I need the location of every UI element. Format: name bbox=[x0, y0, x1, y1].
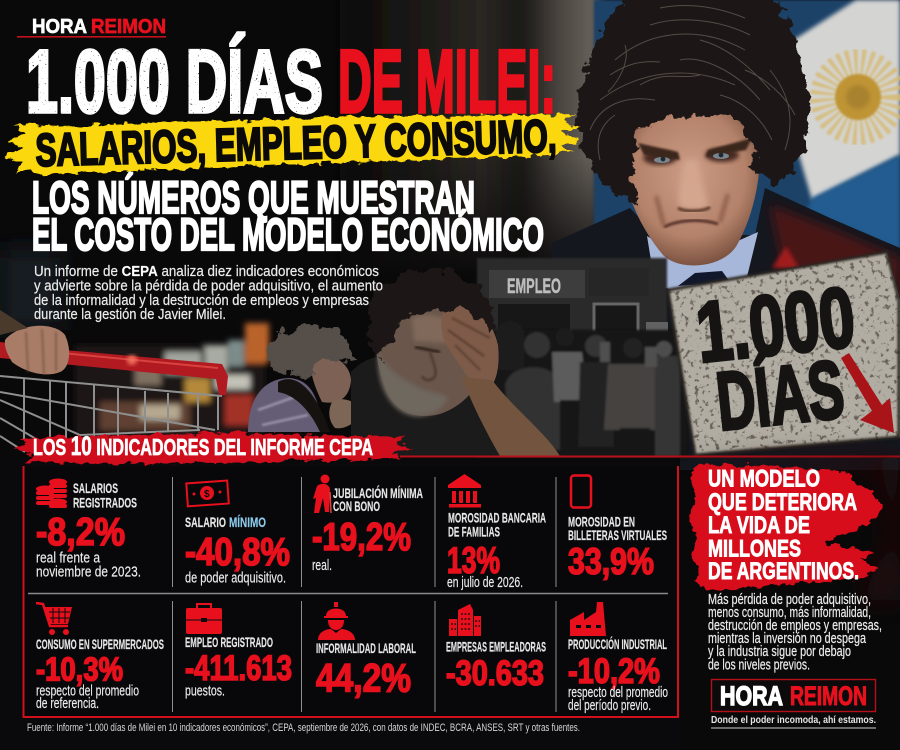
small brand: HORA bbox=[32, 16, 87, 38]
intro paragraph bbox=[34, 264, 383, 323]
indicator: empresas empleadoras bbox=[446, 604, 546, 693]
intro paragraph: durante la gestión de Javier Milei. bbox=[34, 307, 226, 323]
intro paragraph: Un informe de CEPA analiza diez indicadores económicos bbox=[34, 264, 379, 280]
shirt bbox=[647, 232, 758, 292]
indicator: jubilacion minima bbox=[312, 474, 423, 574]
indicator: produccion industrial: -10,2% bbox=[568, 652, 660, 691]
indicator: salarios registrados: real frente a bbox=[36, 550, 101, 566]
title bbox=[4, 31, 580, 260]
indicator: jubilacion minima: -19,2% bbox=[312, 516, 411, 559]
suit bbox=[552, 188, 900, 470]
photo: empleo storefront bbox=[477, 258, 668, 344]
indicator: empleo registrado: -411.613 bbox=[185, 649, 292, 688]
icon: coins bbox=[36, 478, 67, 508]
neck and face bbox=[620, 108, 760, 265]
cart basket bbox=[0, 376, 222, 452]
indicator: consumo supermercados: CONSUMO EN SUPERMERCADOS bbox=[36, 636, 164, 652]
indicator: consumo supermercados: respecto del promedio bbox=[36, 684, 139, 700]
indicator: salario minimo: SALARIO bbox=[185, 514, 226, 530]
arrow: down trend bbox=[841, 353, 894, 433]
indicator: salario minimo: de poder adquisitivo. bbox=[185, 570, 286, 586]
indicator: produccion industrial: PRODUCCIÓN INDUSTRIAL bbox=[568, 635, 667, 652]
indicator: informalidad laboral: INFORMALIDAD LABORAL bbox=[316, 640, 416, 656]
photo: shopping cart with hand bbox=[0, 310, 228, 452]
intro paragraph: de la informalidad y la destrucción de empleos y empresas bbox=[34, 293, 369, 309]
logo: hora reimon bbox=[711, 680, 876, 728]
indicator: morosidad bancaria: 13% bbox=[447, 540, 500, 581]
indicator: morosidad billeteras: MOROSIDAD EN bbox=[568, 514, 635, 530]
title line one red: DE MILEI: bbox=[338, 31, 556, 131]
subtitle line two: EL COSTO DEL MODELO ECONÓMICO bbox=[32, 209, 544, 260]
icon: elderly person bbox=[313, 474, 331, 513]
indicator: morosidad bancaria: en julio de 2026. bbox=[447, 575, 523, 591]
indicator: morosidad billeteras: 33,9% bbox=[568, 541, 654, 582]
indicator: consumo supermercados: -10,3% bbox=[36, 650, 123, 688]
indicator: morosidad bancaria: MOROSIDAD BANCARIA bbox=[448, 510, 546, 526]
banner: section heading bbox=[12, 431, 900, 464]
icon: banknote: $ bbox=[204, 489, 210, 500]
indicator: empleo registrado: EMPLEO REGISTRADO bbox=[185, 634, 273, 650]
indicator: informalidad laboral bbox=[316, 602, 416, 700]
indicator: salarios registrados: -8,2% bbox=[36, 511, 125, 554]
indicator: salario minimo: -40,8% bbox=[185, 531, 290, 574]
icon: phone bbox=[571, 476, 591, 508]
indicator: salarios registrados: SALARIOS bbox=[73, 480, 118, 496]
photo: queue of people bbox=[477, 321, 687, 460]
icon: shopping cart bbox=[36, 603, 72, 635]
callout brush bbox=[690, 464, 884, 589]
indicator: produccion industrial bbox=[568, 602, 668, 714]
indicator: morosidad bancaria bbox=[447, 474, 546, 591]
callout paragraph: y la industria sigue por debajo bbox=[708, 644, 851, 660]
indicator: produccion industrial: del período previo. bbox=[568, 698, 651, 714]
icon: sun of may bbox=[824, 63, 892, 131]
icon: factory bbox=[570, 602, 606, 636]
indicator: jubilacion minima: CON BONO bbox=[333, 498, 380, 514]
hand bbox=[5, 326, 69, 374]
photo: red streaks near callout bbox=[680, 458, 900, 600]
callout: modelo: MILLONES bbox=[708, 536, 801, 562]
indicator: salarios registrados: REGISTRADOS bbox=[73, 494, 137, 510]
sign: 1.000 días bbox=[668, 252, 900, 455]
indicator: morosidad bancaria: DE FAMILIAS bbox=[448, 524, 500, 540]
photo: man with hand on forehead bbox=[351, 269, 560, 457]
indicator: empleo registrado: puestos. bbox=[185, 684, 225, 700]
callout: modelo: LA VIDA DE bbox=[708, 512, 810, 539]
callout: modelo bbox=[690, 464, 884, 589]
indicator: jubilacion minima: JUBILACIÓN MÍNIMA bbox=[333, 484, 423, 501]
indicator: consumo supermercados: de referencia. bbox=[36, 696, 99, 712]
indicator: empleo registrado bbox=[185, 604, 292, 700]
indicator: consumo supermercados bbox=[36, 603, 164, 712]
intro paragraph: y advierte sobre la pérdida de poder adquisitivo, el aumento bbox=[34, 278, 383, 294]
photo: Javier Milei portrait bbox=[552, 0, 900, 470]
indicator: morosidad billeteras bbox=[568, 476, 667, 582]
icon: office building bbox=[449, 604, 481, 636]
yellow brush stroke bbox=[4, 114, 580, 176]
indicator: empresas empleadoras: EMPRESAS EMPLEADORAS bbox=[446, 638, 546, 654]
subtitle line one: LOS NÚMEROS QUE MUESTRAN bbox=[32, 172, 475, 223]
indicator: empresas empleadoras: -30.633 bbox=[446, 654, 544, 693]
heading text: LOS 10 INDICADORES DEL INFORME CEPA bbox=[33, 431, 373, 461]
indicator: salario minimo bbox=[185, 481, 290, 586]
callout paragraph bbox=[708, 592, 882, 674]
icon: bank bbox=[448, 474, 481, 508]
indicator: salario minimo: MÍNIMO bbox=[229, 514, 266, 530]
callout paragraph: de los niveles previos. bbox=[708, 658, 810, 674]
label: empleo sign: EMPLEO bbox=[507, 275, 561, 298]
icon: worker bbox=[318, 602, 355, 640]
photo: argentine flag bbox=[594, 0, 900, 250]
indicator: informalidad laboral: 44,2% bbox=[316, 656, 411, 700]
hair bbox=[576, 0, 809, 202]
indicator: salarios registrados bbox=[36, 478, 141, 580]
indicator: jubilacion minima: real. bbox=[312, 558, 332, 574]
small brand: REIMON bbox=[91, 16, 166, 38]
panel: indicators bbox=[0, 458, 680, 750]
cart handle bbox=[0, 342, 228, 395]
indicator: morosidad billeteras: BILLETERAS VIRTUALES bbox=[568, 527, 667, 543]
logo: hora reimon: REIMON bbox=[790, 681, 867, 711]
source note: Fuente: Informe “1.000 días de Milei en 10 indicadores económicos”, CEPA, septiembre de 2026, con datos de INDEC, BCRA, ANSES, SRT y otras fuentes. bbox=[27, 722, 580, 734]
photo: supermarket shelves bbox=[75, 323, 269, 435]
photo: elderly woman bbox=[248, 325, 360, 432]
yellow headline: SALARIOS, EMPLEO Y CONSUMO, bbox=[35, 109, 557, 176]
title line one: 1.000 DÍAS bbox=[26, 31, 323, 131]
icon: briefcase bbox=[186, 604, 222, 634]
indicator: salarios registrados: noviembre de 2023. bbox=[36, 564, 141, 580]
indicator: produccion industrial: respecto del promedio bbox=[568, 685, 668, 701]
callout: modelo: UN MODELO bbox=[708, 466, 820, 492]
photo: city building backdrop bbox=[0, 0, 600, 330]
logo: hora reimon: HORA bbox=[720, 681, 783, 711]
small brand bbox=[17, 16, 166, 38]
